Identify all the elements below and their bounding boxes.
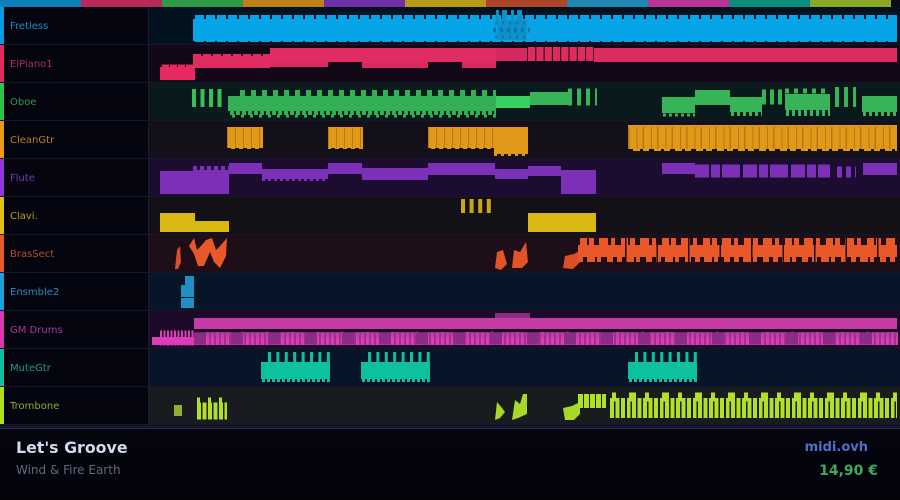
track row: BrasSect: BrasSect — [10, 249, 54, 260]
artist name: Wind & Fire Earth — [16, 463, 121, 477]
track row: Fretless — [0, 7, 900, 44]
track row: Ensmble2 — [0, 273, 900, 310]
track row: Flute: Flute — [10, 173, 35, 184]
track row: Clavi. — [0, 197, 900, 234]
track row: MuteGtr — [0, 349, 900, 386]
track row: GM Drums: GM Drums — [10, 325, 63, 336]
label column divider — [148, 7, 150, 428]
track row: GM Drums — [0, 311, 900, 348]
track row: Flute — [0, 159, 900, 196]
track row: BrasSect — [0, 235, 900, 272]
track row: Fretless: Fretless — [10, 21, 48, 32]
top colour strip — [0, 0, 900, 7]
track row: CleanGtr — [0, 121, 900, 158]
track row: Ensmble2: Ensmble2 — [10, 287, 59, 298]
song title: Let's Groove — [16, 438, 128, 457]
price: 14,90 € — [819, 463, 878, 479]
track row: Clavi.: Clavi. — [10, 211, 38, 222]
track row: Oboe — [0, 83, 900, 120]
track row: ElPiano1 — [0, 45, 900, 82]
track row: ElPiano1: ElPiano1 — [10, 59, 53, 70]
track row: Trombone: Trombone — [9, 401, 59, 412]
track row: Oboe: Oboe — [10, 97, 36, 108]
footer panel — [0, 428, 900, 500]
track row: CleanGtr: CleanGtr — [10, 135, 55, 146]
track row: MuteGtr: MuteGtr — [10, 363, 52, 374]
site name: midi.ovh — [805, 440, 868, 455]
track row: Trombone — [0, 387, 900, 424]
